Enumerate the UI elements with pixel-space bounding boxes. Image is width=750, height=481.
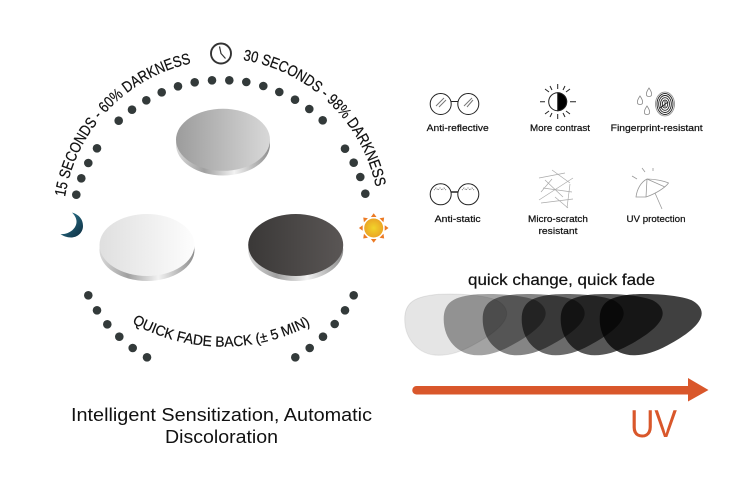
icon: more contrast: [540, 84, 576, 119]
title: Discoloration: [165, 427, 278, 447]
title: [71, 405, 372, 447]
arrow: [412, 378, 708, 402]
clock icon: [211, 44, 231, 64]
icon: sun: [359, 213, 388, 243]
lens: medium: [176, 109, 270, 176]
title: Intelligent Sensitization, Automatic: [71, 405, 372, 425]
icon: moon: [60, 212, 83, 238]
icon: fingerprint and drops: [637, 88, 674, 116]
dotted arc: top: [72, 76, 370, 199]
heading: quick change: quick change, quick fade: [468, 272, 655, 289]
uv label: UV: [630, 403, 677, 446]
label: micro-scratch resistant: resistant: [538, 226, 578, 237]
label: more contrast: More contrast: [530, 123, 590, 134]
lens: clear: [100, 214, 194, 281]
arc label: quick fade back: QUICK FADE BACK (± 5 MIN): [134, 316, 310, 347]
lens sequence: [405, 294, 702, 355]
label: anti-static: Anti-static: [435, 214, 481, 225]
icon: micro-scratches: [539, 170, 573, 208]
label: anti-reflective: Anti-reflective: [427, 123, 489, 134]
label: micro-scratch resistant: [528, 214, 588, 237]
arc label: 15 seconds: 15 SECONDS - 60% DARKNESS: [55, 54, 190, 196]
icon: anti-reflective glasses: [430, 94, 479, 114]
arc label: 30 seconds: 30 SECONDS - 98% DARKNESS: [244, 50, 386, 186]
lens: dark: [248, 214, 343, 281]
label: micro-scratch resistant: Micro-scratch: [528, 214, 588, 225]
label: fingerprint-resistant: Fingerprint-resistant: [611, 123, 703, 134]
label: uv protection: UV protection: [626, 214, 686, 225]
icon: anti-static glasses: [430, 184, 479, 205]
dotted arc: bottom: [84, 291, 358, 362]
icon: umbrella: [632, 168, 668, 209]
